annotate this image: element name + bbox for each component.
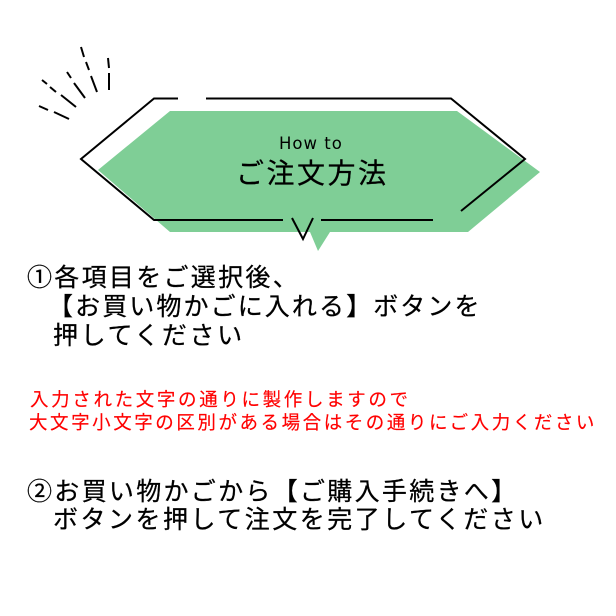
black banner outline [81, 98, 525, 239]
step 1 text: 押してください [53, 322, 245, 350]
green banner shape [98, 111, 540, 251]
step 2 text: ボタンを押して注文を完了してください [53, 506, 546, 534]
heading: How to: How to [279, 134, 343, 153]
step 1 text: ①各項目をご選択後、 [27, 264, 300, 292]
red note text: 大文字小文字の区別がある場合はその通りにご入力ください [29, 412, 597, 433]
red note text [29, 389, 597, 433]
red note text: 入力された文字の通りに製作しますので [30, 389, 411, 410]
step 2 text: ②お買い物かごから【ご購入手続きへ】 [27, 478, 518, 506]
step 2 text [27, 478, 546, 534]
heading: order method: ご注文方法 [236, 158, 389, 189]
icon: burst rays [39, 47, 109, 119]
banner: order method heading [81, 98, 540, 251]
step 1 text: 【お買い物かごに入れる】ボタンを [48, 293, 482, 321]
step 1 text [27, 264, 482, 350]
